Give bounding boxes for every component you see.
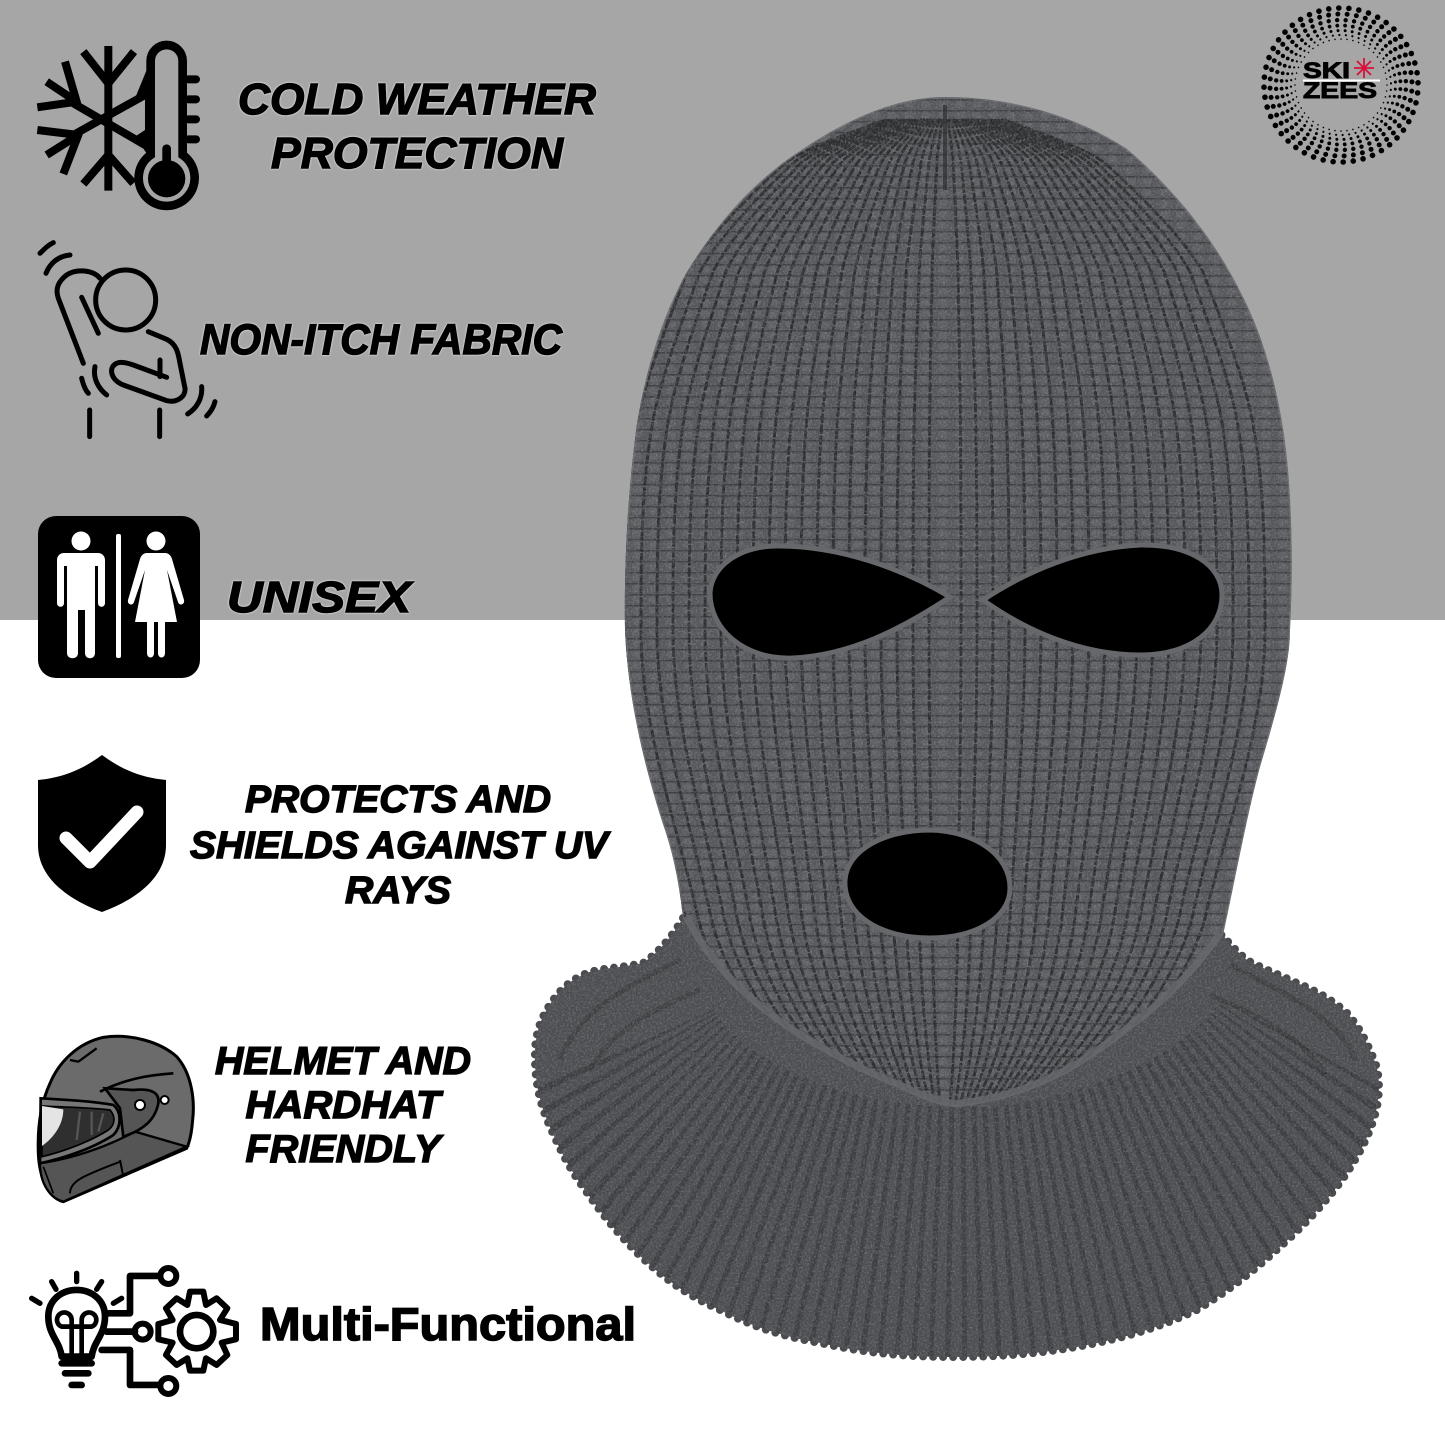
mouth opening [845, 830, 1010, 938]
collar of balaclava [530, 900, 1380, 1360]
text block: helmet and hardhat friendly [215, 1040, 471, 1171]
heading: unisex: UNISEX [227, 573, 414, 622]
logo dotted spiral ring [1259, 3, 1423, 167]
feature: cold weather protection [37, 45, 596, 206]
logo wordmark ZEES: ZEES [1303, 78, 1377, 103]
heading: cold weather protection: PROTECTION [271, 129, 564, 178]
icon: man and woman restroom sign [38, 516, 200, 678]
product: knit balaclava [530, 90, 1380, 1360]
icon: shield with checkmark [38, 755, 166, 912]
feature: multi-functional [32, 1268, 636, 1394]
icon: light bulb linked to gear [32, 1268, 236, 1394]
text block: protects and shields against UV rays: RAYS [345, 870, 451, 912]
feature: non-itch fabric [40, 243, 563, 437]
right eye opening [983, 545, 1222, 655]
logo divider line [1303, 80, 1380, 82]
logo red star [1354, 58, 1374, 78]
heading: cold weather protection [238, 75, 596, 178]
text block: protects and shields against UV rays: PROTECTS AND [245, 779, 551, 821]
text block: helmet and hardhat friendly: HELMET AND [215, 1040, 471, 1083]
feature: helmet and hardhat friendly [38, 1036, 471, 1202]
feature: unisex [38, 516, 414, 678]
logo wordmark SKI: SKI [1303, 58, 1350, 83]
text block: helmet and hardhat friendly: HARDHAT [246, 1084, 444, 1127]
icon: snowflake and thermometer [37, 45, 196, 206]
logo: Ski Zees [1259, 3, 1423, 167]
text block: helmet and hardhat friendly: FRIENDLY [246, 1128, 444, 1171]
text block: protects and shields against UV rays: SHIELDS AGAINST UV [190, 825, 611, 867]
feature: UV protection [38, 755, 611, 912]
heading: multi-functional: Multi-Functional [260, 1298, 636, 1350]
left eye opening [710, 546, 950, 658]
text block: protects and shields against UV rays [190, 779, 611, 912]
icon: motorcycle helmet [38, 1036, 193, 1202]
background: gray upper band [0, 0, 1445, 620]
heading: non-itch fabric: NON-ITCH FABRIC [200, 316, 563, 364]
head of balaclava [620, 90, 1300, 1140]
icon: person scratching [40, 243, 215, 437]
heading: cold weather protection: COLD WEATHER [238, 75, 596, 124]
background: white lower band [0, 620, 1445, 1445]
